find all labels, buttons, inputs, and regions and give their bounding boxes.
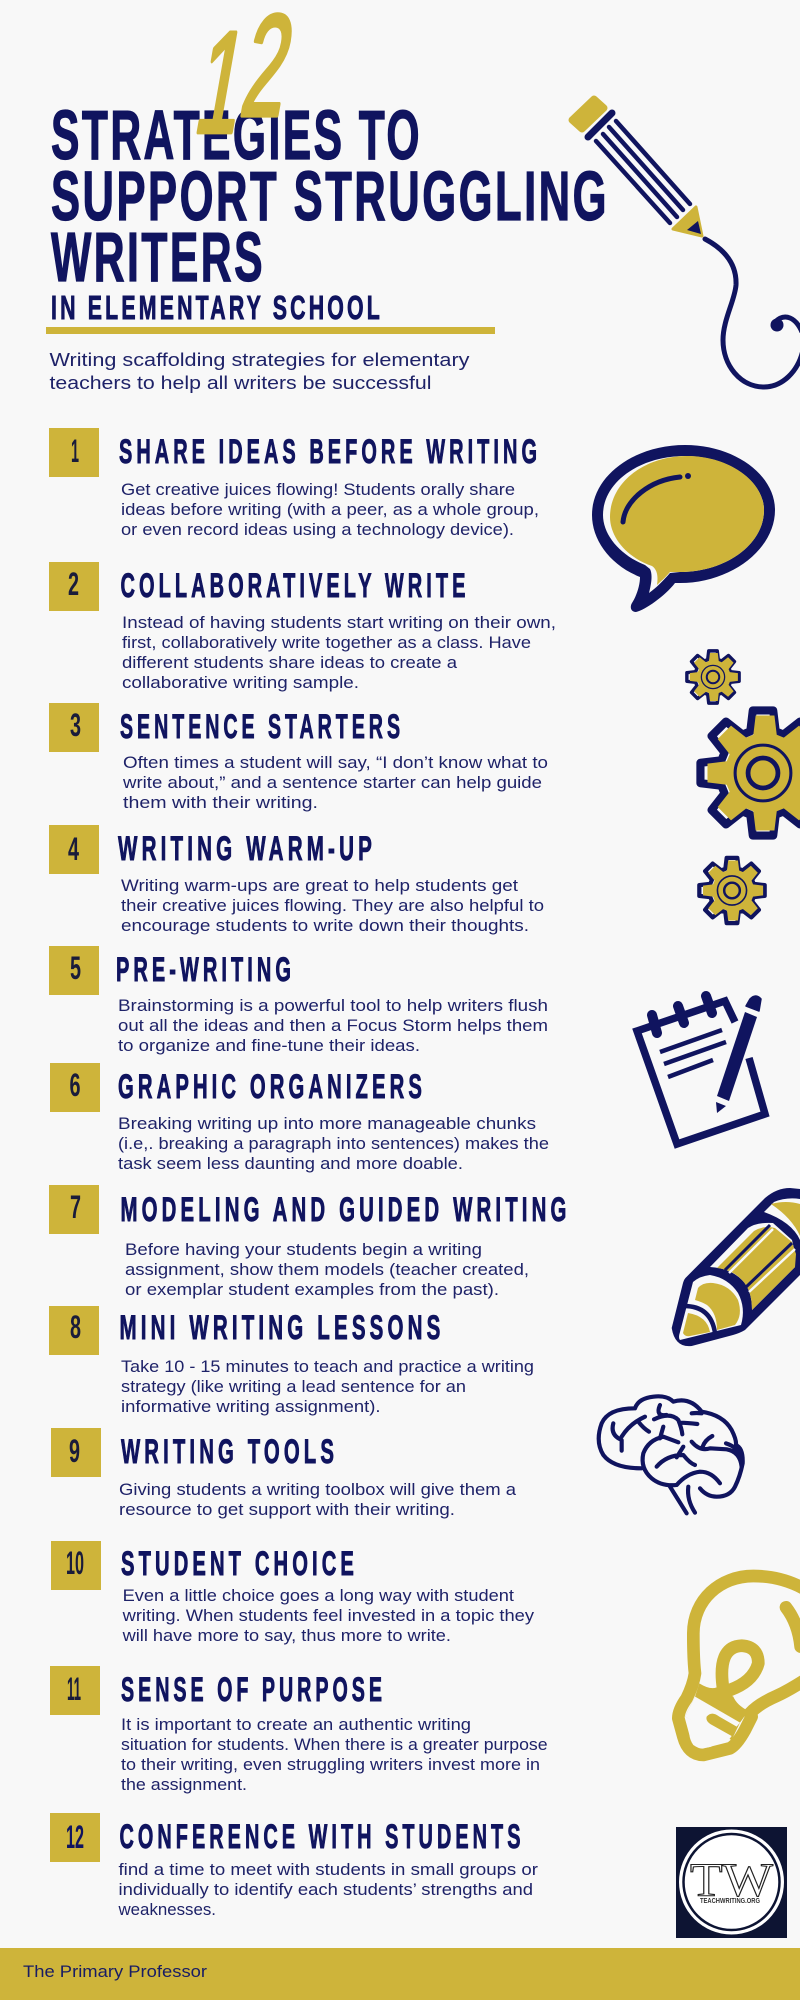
strategy 10 [51,1541,535,1645]
body 10 [121,1587,535,1645]
heading 5: PRE-WRITING [116,951,295,989]
strategy 7 [49,1185,570,1299]
heading 2: COLLABORATIVELY WRITE [120,567,470,605]
body 10: Even a little choice goes a long way with student [123,1587,514,1605]
title numeral: 12: 1 [187,2,258,163]
body 3: Often times a student will say, “I don’t know what to [123,754,548,772]
number box 4: 4 [68,831,79,867]
intro text: teachers to help all writers be successful [50,372,432,393]
icon: notepad and pen [637,996,765,1144]
body 6: Breaking writing up into more manageable chunks [118,1115,536,1133]
body 5: to organize and fine-tune their ideas. [118,1037,420,1055]
footer band [0,1948,800,2000]
body 10: writing. When students feel invested in a topic they [121,1607,535,1625]
icon: speech bubble [592,445,775,612]
number box 11 [50,1666,100,1715]
number box 8 [49,1306,99,1355]
number box 5 [49,946,99,995]
icon: large pencil [672,1188,800,1346]
number box 3 [49,703,99,752]
number box 5: 5 [70,950,81,986]
body 7: or exemplar student examples from the past). [125,1281,499,1299]
body 3: write about,” and a sentence starter can help guide [122,774,542,792]
body 4: their creative juices flowing. They are also helpful to [121,897,544,915]
number box 11: 11 [67,1671,81,1707]
body 1: ideas before writing (with a peer, as a whole group, [121,501,539,519]
body 11: the assignment. [121,1776,247,1794]
strategy 12 [50,1813,539,1919]
number box 10 [51,1541,101,1590]
number box 9 [51,1428,101,1477]
body 11: to their writing, even struggling writers invest more in [121,1756,540,1774]
body 1: or even record ideas using a technology device). [121,521,514,539]
heading 6: GRAPHIC ORGANIZERS [118,1068,426,1106]
body 4: encourage students to write down their thoughts. [121,917,529,935]
body 7 [125,1241,529,1299]
strategy 11 [50,1666,548,1794]
heading 9: WRITING TOOLS [121,1433,338,1471]
heading 10: STUDENT CHOICE [121,1545,358,1583]
body 9 [119,1481,517,1519]
number box 12 [50,1813,100,1862]
body 12: find a time to meet with students in small groups or [118,1861,539,1879]
body 2: Instead of having students start writing on their own, [122,614,556,632]
number box 12: 12 [66,1819,84,1855]
body 2: first, collaboratively write together as a class. Have [122,634,531,652]
body 6: task seem less daunting and more doable. [118,1155,463,1173]
strategy 4 [49,825,544,935]
body 3 [122,754,548,812]
number box 9: 9 [69,1433,80,1469]
heading 4: WRITING WARM-UP [118,830,376,868]
gold rule [46,327,495,334]
number box 3: 3 [70,707,81,743]
heading 8: MINI WRITING LESSONS [120,1309,444,1347]
title: WRITERS [51,218,265,296]
logo: TeachWriting.org: TEACHWRITING.ORG [700,1896,760,1905]
icon: brain [599,1396,743,1513]
body 1: Get creative juices flowing! Students orally share [121,481,515,499]
strategy 3 [49,703,548,812]
body 10: will have more to say, thus more to write. [121,1627,451,1645]
intro text: Writing scaffolding strategies for elementary [50,349,470,370]
body 11: situation for students. When there is a greater purpose [121,1736,548,1754]
title [51,96,609,296]
body 2: different students share ideas to create a [122,654,458,672]
number box 2: 2 [68,566,79,602]
body 4 [121,877,544,935]
strategy 6 [50,1063,549,1173]
intro text [50,349,470,393]
number box 6: 6 [70,1067,80,1103]
body 8: informative writing assignment). [121,1398,380,1416]
body 6: (i.e,. breaking a paragraph into sentences) makes the [118,1135,549,1153]
body 5 [118,997,548,1055]
icon: medium gear [699,858,765,923]
heading 3: SENTENCE STARTERS [120,708,404,746]
body 3: them with their writing. [123,794,318,812]
number box 7: 7 [70,1189,81,1225]
icon: small gear [687,651,739,703]
number box 2 [49,562,99,611]
heading 11: SENSE OF PURPOSE [121,1671,386,1709]
body 11 [121,1716,548,1794]
logo: TeachWriting.org [676,1827,787,1938]
body 1 [121,481,539,539]
number box 8: 8 [70,1309,81,1345]
body 12: individually to identify each students’ strengths and [118,1881,533,1899]
body 5: out all the ideas and then a Focus Storm helps them [118,1017,548,1035]
number box 1: 1 [71,433,79,469]
body 9: resource to get support with their writing. [119,1501,455,1519]
icon: light bulb [678,1576,800,1755]
body 8 [121,1358,534,1416]
number box 10: 10 [66,1545,84,1581]
title: STRATEGIES TO [51,96,422,174]
icon: large gear [700,710,800,836]
icon: pencil with squiggle [572,99,800,387]
number box 1 [49,428,99,477]
number box 6 [50,1063,100,1112]
body 11: It is important to create an authentic writing [121,1716,471,1734]
body 8: strategy (like writing a lead sentence for an [121,1378,466,1396]
strategy 8 [49,1306,534,1416]
body 5: Brainstorming is a powerful tool to help writers flush [118,997,548,1015]
body 12 [117,1861,539,1919]
number box 4 [49,825,99,874]
strategy 1 [49,428,541,539]
body 2 [122,614,556,692]
body 9: Giving students a writing toolbox will give them a [119,1481,517,1499]
footer text: The Primary Professor [23,1963,208,1981]
strategy 2 [49,562,556,692]
number box 7 [49,1185,99,1234]
logo: TeachWriting.org: TW [690,1854,774,1907]
body 4: Writing warm-ups are great to help students get [121,877,518,895]
title numeral: 12 [187,0,304,163]
body 2: collaborative writing sample. [122,674,359,692]
body 8: Take 10 - 15 minutes to teach and practice a writing [121,1358,534,1376]
body 7: Before having your students begin a writing [125,1241,482,1259]
body 7: assignment, show them models (teacher created, [125,1261,529,1279]
body 12: weaknesses. [117,1901,216,1919]
strategy 5 [49,946,548,1055]
subtitle heading: IN ELEMENTARY SCHOOL [51,290,383,327]
body 6 [118,1115,549,1173]
strategy 9 [51,1428,517,1519]
